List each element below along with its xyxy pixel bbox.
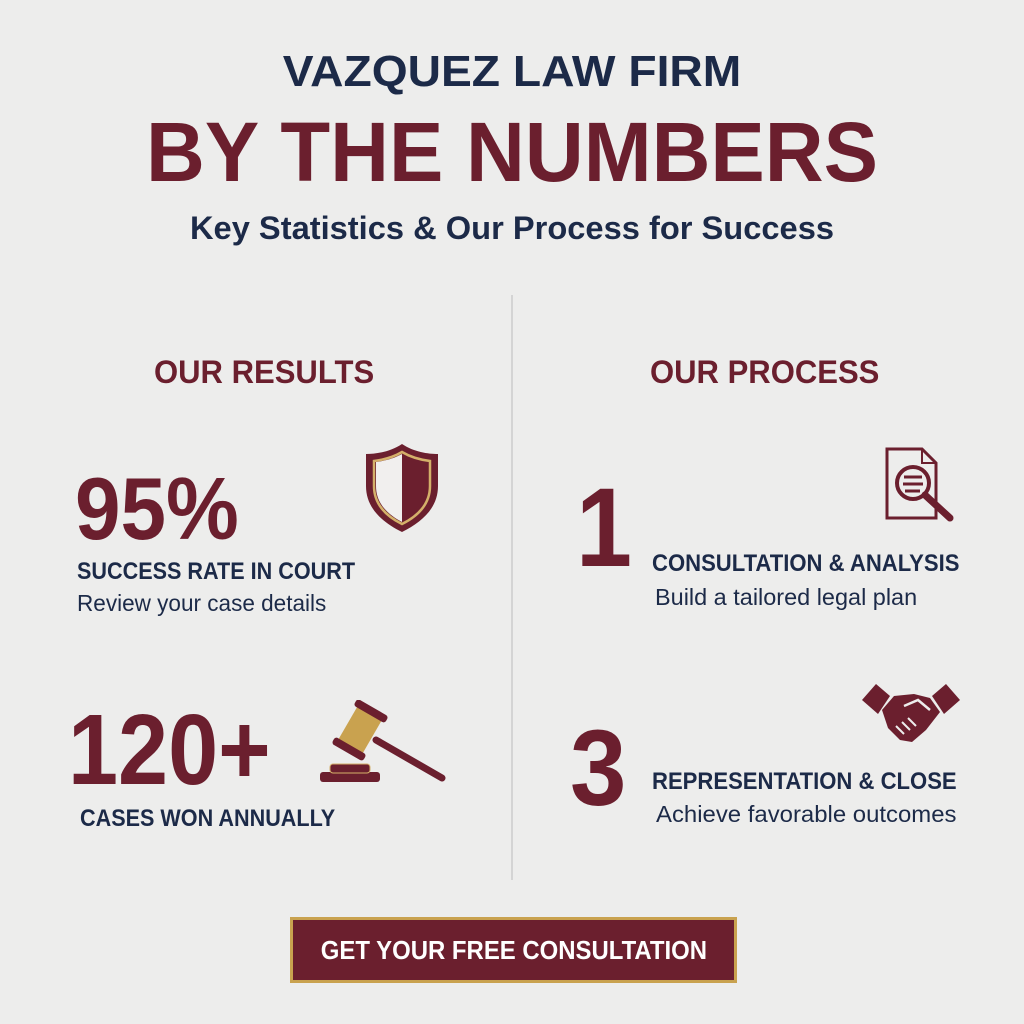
stat: 120+: 120+: [68, 694, 271, 806]
panel: process: [570, 354, 960, 828]
text: review: Review your case details: [77, 590, 326, 616]
label: representation: REPRESENTATION & CLOSE: [652, 768, 957, 795]
icon: handshake: [862, 684, 960, 742]
label: consultation: CONSULTATION & ANALYSIS: [652, 550, 959, 577]
panel: results: [68, 354, 446, 832]
icon: gavel: [320, 700, 446, 782]
text: build plan: Build a tailored legal plan: [655, 584, 917, 610]
title: firm name: VAZQUEZ LAW FIRM: [283, 47, 741, 96]
step number 3: 3: [570, 707, 626, 828]
label: success rate: SUCCESS RATE IN COURT: [77, 558, 355, 585]
stat: 95%: 95%: [75, 459, 239, 558]
button: cta: [290, 917, 737, 983]
step number 1: 1: [576, 465, 632, 590]
button: cta: GET YOUR FREE CONSULTATION: [320, 935, 707, 965]
icon: shield: [366, 444, 438, 532]
icon: document search: [886, 448, 954, 522]
label: cases won: CASES WON ANNUALLY: [80, 805, 335, 832]
subtitle: Key Statistics & Our Process for Success: [190, 210, 834, 246]
text: achieve: Achieve favorable outcomes: [656, 801, 956, 827]
heading: our process: OUR PROCESS: [650, 354, 879, 390]
title: by the numbers: BY THE NUMBERS: [146, 105, 878, 199]
divider: [511, 295, 513, 880]
heading: our results: OUR RESULTS: [154, 354, 374, 390]
